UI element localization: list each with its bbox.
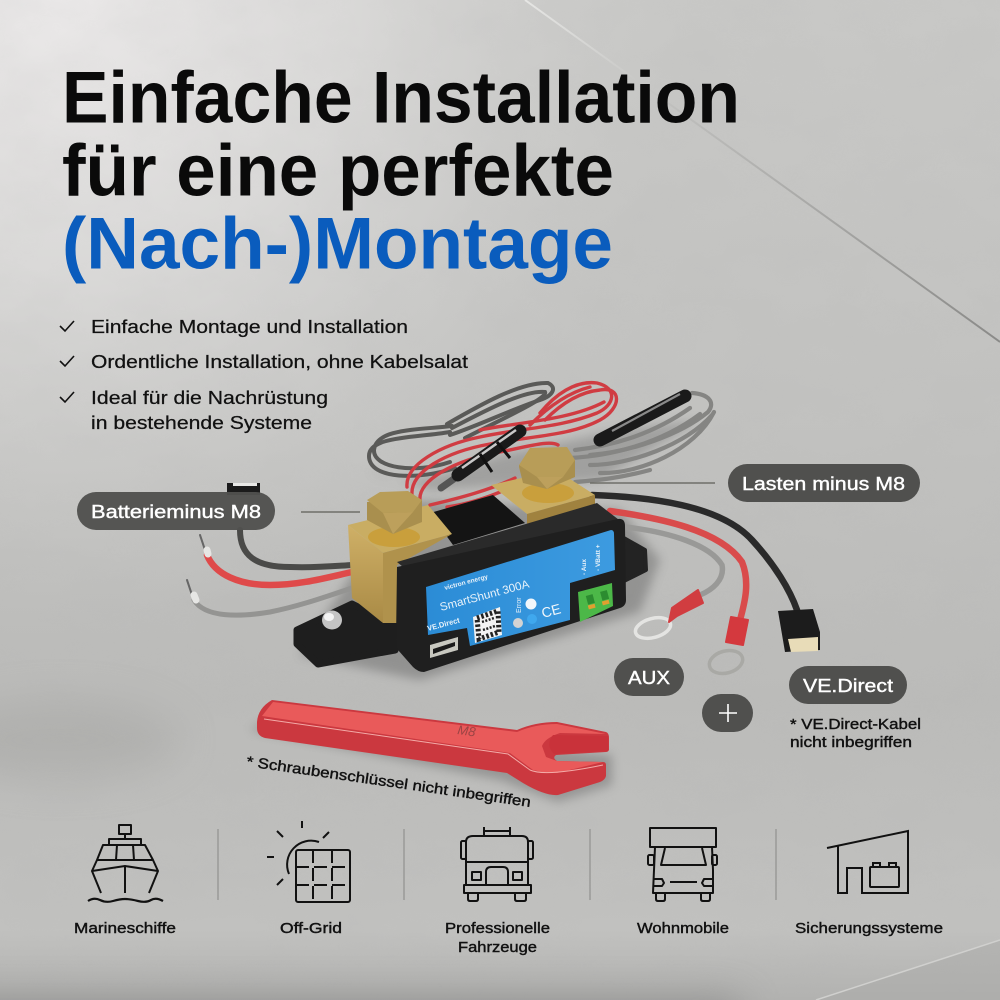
QR code bbox=[473, 607, 502, 643]
blue label bbox=[426, 530, 615, 646]
positive ring terminal bbox=[707, 617, 748, 677]
label: Batterieminus M8: Batterieminus M8 bbox=[91, 501, 261, 522]
label: Sicherungssysteme: Sicherungssysteme bbox=[795, 921, 943, 937]
icon: ship bbox=[88, 825, 163, 902]
check item 3: Ideal für die Nachrüstung bbox=[91, 387, 328, 408]
wrench bbox=[250, 700, 612, 802]
label: AUX bbox=[614, 658, 684, 696]
coiled red cable bbox=[407, 383, 616, 507]
right brass block bbox=[491, 470, 595, 524]
product: SmartShunt with cables bbox=[187, 383, 820, 680]
mounting foot bbox=[297, 604, 395, 664]
label: Off-Grid: Off-Grid bbox=[280, 921, 342, 937]
blue label: SmartShunt 300A bbox=[439, 578, 531, 614]
title: Einfache Installation bbox=[62, 58, 740, 138]
label: Professionelle Fahrzeuge: Professionelle bbox=[445, 921, 550, 937]
blue label: victron energy bbox=[444, 573, 489, 592]
green terminal bbox=[578, 583, 613, 622]
product shadow bbox=[300, 500, 660, 680]
wrench highlight bbox=[264, 719, 603, 773]
cable: positive red bbox=[610, 511, 746, 620]
mounting screw bbox=[322, 610, 342, 630]
coiled gray cable right bbox=[570, 393, 714, 482]
note: VE.Direct cable: * VE.Direct-Kabel bbox=[790, 717, 921, 733]
cable: black bbox=[240, 530, 352, 567]
connector behind pill bbox=[227, 483, 260, 495]
blue label: CE bbox=[540, 600, 563, 621]
label: Wohnmobile: Wohnmobile bbox=[637, 921, 729, 937]
title bbox=[62, 58, 740, 284]
wrench body bbox=[257, 700, 609, 795]
coiled gray cable left bbox=[369, 383, 553, 476]
left bolt bbox=[367, 491, 422, 547]
fuse holder 1 bbox=[441, 430, 520, 488]
label: VE.Direct: VE.Direct bbox=[803, 675, 893, 696]
blue label: Error bbox=[516, 597, 523, 613]
leader line: Batterieminus bbox=[301, 511, 360, 513]
cables front left bbox=[187, 530, 352, 615]
right mounting ear bbox=[622, 537, 646, 582]
wrench marking: M8 bbox=[457, 722, 477, 740]
ferrules bbox=[200, 535, 205, 550]
left brass block bbox=[348, 505, 452, 623]
cable: VE.Direct black bbox=[592, 495, 797, 610]
label: Batterieminus M8 bbox=[77, 492, 275, 530]
label: AUX: AUX bbox=[628, 667, 670, 688]
note: wrench not included: * Schraubenschlüssel nicht inbegriffen bbox=[245, 754, 532, 811]
label: Lasten minus M8: Lasten minus M8 bbox=[742, 473, 905, 494]
VE.Direct connector bbox=[778, 609, 820, 652]
cable: gray bbox=[194, 588, 352, 615]
title: (Nach-)Montage bbox=[62, 204, 613, 284]
wrench shadow bbox=[250, 720, 612, 802]
label: Professionelle Fahrzeuge bbox=[445, 921, 550, 956]
cable: aux gray bbox=[625, 527, 722, 595]
fuse holder 2 bbox=[600, 394, 685, 440]
coil shadow bbox=[368, 420, 700, 490]
VE.Direct port bbox=[430, 637, 458, 658]
wrench jaw inner bbox=[549, 735, 608, 754]
check item 3 bbox=[60, 387, 328, 433]
icon: solar panel bbox=[267, 821, 350, 902]
feature list bbox=[60, 316, 468, 433]
right bolt bbox=[519, 447, 575, 503]
wrench top face bbox=[262, 702, 606, 773]
blue label: - VBatt + bbox=[595, 544, 602, 571]
label: plus bbox=[702, 694, 753, 732]
icon: motorhome bbox=[648, 828, 717, 901]
label: Marineschiffe: Marineschiffe bbox=[74, 921, 176, 937]
blue label: - Aux bbox=[581, 559, 588, 575]
check item 2: Ordentliche Installation, ohne Kabelsalat bbox=[91, 351, 468, 372]
icon: storage shed with battery bbox=[827, 831, 908, 893]
blue label: VE.Direct bbox=[426, 615, 461, 633]
shunt housing bbox=[396, 503, 626, 672]
check item 1: Einfache Montage und Installation bbox=[91, 316, 408, 337]
black bridge bbox=[430, 495, 525, 545]
aux ring terminal bbox=[633, 590, 703, 642]
label: Professionelle Fahrzeuge: Fahrzeuge bbox=[458, 940, 537, 956]
cable: red bbox=[207, 555, 352, 585]
cables front right bbox=[592, 495, 797, 620]
label: VE.Direct bbox=[789, 666, 907, 704]
note: VE.Direct cable: nicht inbegriffen bbox=[790, 735, 912, 751]
check item 3: in bestehende Systeme bbox=[91, 412, 312, 433]
title: für eine perfekte bbox=[62, 130, 614, 212]
note: VE.Direct cable bbox=[790, 717, 921, 751]
leader line: Lasten minus bbox=[590, 482, 715, 484]
icon: truck bbox=[461, 827, 533, 901]
label: Lasten minus M8 bbox=[728, 464, 920, 502]
